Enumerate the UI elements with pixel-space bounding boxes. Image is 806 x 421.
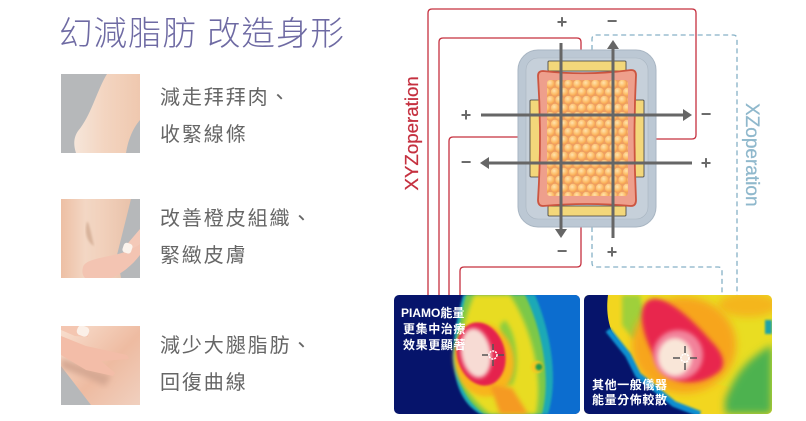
thermal image: other devices [584,293,778,414]
photo: abdomen [61,199,140,278]
title: 幻減脂肪 改造身形 [59,16,345,53]
honeycomb array [547,80,628,196]
text: benefit 1: 減走拜拜肉、 [160,87,291,109]
arrow: vertical up [607,40,619,238]
thermal image: PIAMO [394,295,580,414]
caption: 效果更顯著 [403,337,466,352]
diagram [394,8,772,414]
arrow: vertical down [555,43,567,238]
text: benefit 1: 收緊線條 [160,124,248,146]
caption [401,305,466,352]
photo: thigh [61,326,140,405]
polarity signs: + [557,12,567,32]
caption [592,377,668,407]
device head [518,50,656,227]
yellow electrodes [530,61,644,216]
polarity signs [461,11,711,262]
device housing [518,50,656,227]
text: benefit 2: 改善橙皮組織、 [160,208,313,230]
polarity signs: − [607,11,617,31]
polarity signs: + [461,105,471,125]
blue dashed connector lines [592,35,737,295]
text: benefit 1 [160,87,291,146]
caption: 更集中治療 [403,321,466,336]
photo: arm [61,74,140,153]
arrow: horizontal left [480,157,692,169]
polarity signs: − [557,241,567,261]
arrow: horizontal right [481,109,692,121]
red pad [538,70,636,206]
crosshair [482,344,504,366]
text: benefit 3: 回復曲線 [160,372,248,394]
label: XYZ operation: XYZoperation [401,76,422,190]
crosshair [673,346,697,370]
caption: PIAMO能量 [401,305,464,320]
text: benefit 2 [160,208,313,266]
polarity signs: − [701,104,711,124]
label: XZ operation: XZoperation [741,103,762,207]
text: benefit 3 [160,335,313,394]
caption: 能量分佈較散 [592,392,668,407]
text: benefit 2: 緊緻皮膚 [160,244,248,266]
red connector lines [428,9,696,295]
caption: 其他一般儀器 [592,377,668,392]
polarity signs: + [607,242,617,262]
text: benefit 3: 減少大腿脂肪、 [160,335,313,357]
polarity signs: − [461,152,471,172]
polarity signs: + [701,153,711,173]
